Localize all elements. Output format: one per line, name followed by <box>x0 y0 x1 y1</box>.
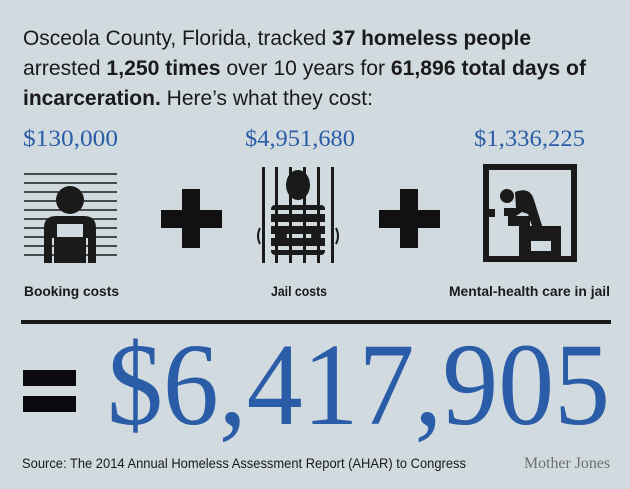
prices: $1,336,225 <box>474 126 585 151</box>
icon: plus 2 <box>379 189 440 248</box>
prices: $4,951,680 <box>245 126 355 151</box>
icon: jail bars <box>258 167 338 263</box>
labels: Jail costs <box>271 283 327 299</box>
icon: mental health <box>483 164 577 262</box>
total: $6,417,905 <box>107 319 610 450</box>
labels <box>24 283 610 299</box>
icon: plus 1 <box>161 189 222 248</box>
prices <box>23 126 585 151</box>
title: incarceration. Here’s what they cost: <box>23 87 373 110</box>
logo: Mother Jones: Mother Jones <box>524 455 610 472</box>
title: Osceola County, Florida, tracked 37 homeless people <box>23 27 531 50</box>
title: arrested 1,250 times over 10 years for 61,896 total days of <box>23 57 587 80</box>
title <box>23 27 587 110</box>
labels: Booking costs <box>24 283 119 299</box>
divider <box>21 320 611 324</box>
prices: $130,000 <box>23 126 118 151</box>
icon: booking mugshot <box>24 174 117 263</box>
labels: Mental-health care in jail <box>449 283 610 299</box>
equals sign <box>23 370 76 412</box>
source: Source: The 2014 Annual Homeless Assessment Report (AHAR) to Congress <box>22 455 466 471</box>
